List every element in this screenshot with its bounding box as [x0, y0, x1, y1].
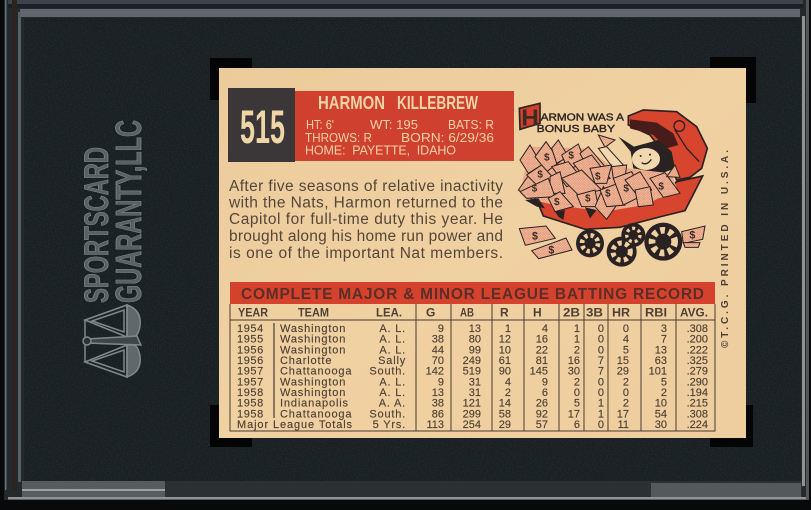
table data rows: 17 — [568, 408, 580, 420]
table data rows: 4 — [505, 376, 511, 388]
table data rows: 1 — [505, 323, 511, 335]
pile of money: $ — [537, 169, 543, 180]
cartoon caption: H — [521, 104, 539, 130]
table header row: AB — [460, 306, 474, 320]
table data rows: 0 — [623, 387, 629, 399]
table data rows: A. A. — [379, 398, 406, 410]
logo text: Sportscard Guaranty, LLC — [78, 120, 149, 303]
table data rows: 9 — [438, 323, 444, 335]
table data rows: 44 — [432, 344, 444, 356]
table data rows: 10 — [499, 344, 511, 356]
player stats: THROWS: R — [305, 131, 372, 145]
table data rows: 2 — [623, 398, 629, 410]
table data rows: 1958 — [237, 387, 264, 399]
table data rows: 38 — [432, 398, 444, 410]
table data rows: 121 — [463, 398, 481, 410]
table data rows: 0 — [623, 323, 629, 335]
table data rows: South. — [369, 366, 406, 378]
table data rows: 145 — [530, 366, 548, 378]
table data rows: 3 — [661, 323, 667, 335]
table header row: R — [500, 306, 509, 320]
table data rows: 15 — [617, 355, 629, 367]
table data rows: 38 — [432, 334, 444, 346]
pile of money: $ — [544, 153, 550, 164]
table data rows: Chattanooga — [280, 408, 352, 420]
table data rows: 0 — [598, 376, 604, 388]
table header row: AVG. — [680, 306, 708, 320]
table title band: COMPLETE MAJOR & MINOR LEAGUE BATTING RECORD — [241, 286, 704, 303]
grading company logo — [78, 120, 149, 377]
table header row: LEA. — [376, 306, 402, 320]
player name — [318, 93, 478, 113]
table data rows: 2 — [505, 387, 511, 399]
table data rows: 7 — [598, 366, 604, 378]
table data rows: 4 — [623, 334, 629, 346]
table data rows: 5 Yrs. — [373, 419, 406, 431]
number box — [228, 88, 295, 162]
biography text: After five seasons of relative inactivity — [229, 178, 503, 195]
batting record table — [230, 282, 715, 431]
table data rows: 30 — [568, 366, 580, 378]
table data rows: 54 — [655, 408, 667, 420]
table data rows: 12 — [499, 334, 511, 346]
table data rows: 7 — [598, 355, 604, 367]
loose dollar bills: $ — [548, 244, 554, 256]
pile of money: $ — [554, 197, 560, 208]
table data rows: 80 — [469, 334, 481, 346]
cartoon caption — [519, 103, 624, 135]
table data rows: Charlotte — [280, 355, 332, 367]
table data rows: Chattanooga — [280, 366, 352, 378]
number box: 515 — [240, 100, 285, 153]
icon: scales of justice — [83, 305, 141, 377]
pile of money — [518, 135, 680, 220]
table data rows: 9 — [438, 376, 444, 388]
table data rows: Washington — [280, 344, 346, 356]
printed in USA credit: ©T.C.G. PRINTED IN U.S.A. — [720, 150, 731, 348]
table data rows: 26 — [536, 398, 548, 410]
table header row: TEAM — [298, 306, 329, 320]
table data rows: 1956 — [237, 355, 264, 367]
table data rows: 6 — [542, 387, 548, 399]
table data rows: 0 — [598, 387, 604, 399]
table data rows: 2 — [574, 376, 580, 388]
table data rows: 16 — [536, 334, 548, 346]
table header row: RBI — [645, 306, 667, 320]
table data rows: 4 — [542, 323, 548, 335]
table data rows: 31 — [469, 387, 481, 399]
table data rows: Washington — [280, 376, 346, 388]
table data rows: 58 — [499, 408, 511, 420]
table data rows: 5 — [661, 376, 667, 388]
table data rows: .308 — [687, 323, 708, 335]
table data rows: Washington — [280, 387, 346, 399]
table data rows: 1957 — [237, 376, 264, 388]
pile of money: $ — [585, 194, 591, 205]
table data rows: 31 — [469, 376, 481, 388]
table header row: HR — [612, 306, 630, 320]
table data rows: 5 — [574, 398, 580, 410]
baseball card back — [219, 68, 746, 438]
table data rows: 70 — [432, 355, 444, 367]
table data rows: 17 — [617, 408, 629, 420]
table data rows: 1 — [598, 408, 604, 420]
table data rows: 5 — [623, 344, 629, 356]
player name: HARMON — [318, 93, 385, 113]
cartoon caption: BONUS BABY — [537, 124, 615, 135]
baby — [618, 137, 675, 173]
table data rows: A. L. — [379, 334, 406, 346]
table data rows: 0 — [598, 419, 604, 431]
table data rows: 101 — [649, 366, 667, 378]
table data rows: Sally — [378, 355, 406, 367]
player info panel — [295, 91, 514, 161]
table data rows: A. L. — [379, 323, 406, 335]
table data rows: 29 — [617, 366, 629, 378]
table data rows: 16 — [568, 355, 580, 367]
table data rows: 1 — [574, 323, 580, 335]
table data rows: 1958 — [237, 408, 264, 420]
table data rows: .308 — [687, 408, 708, 420]
table data rows: .200 — [687, 334, 708, 346]
table data rows — [237, 323, 708, 431]
table data rows: 142 — [426, 366, 444, 378]
table data rows: 81 — [536, 355, 548, 367]
table data rows: 29 — [499, 419, 511, 431]
player stats: BORN: 6/29/36 — [401, 131, 494, 145]
table data rows: 1 — [598, 398, 604, 410]
player name: KILLEBREW — [397, 93, 478, 113]
table data rows: 7 — [661, 334, 667, 346]
player stats: BATS: R — [448, 118, 494, 132]
pile of money: $ — [568, 150, 574, 161]
table data rows: .194 — [687, 387, 708, 399]
table data rows: 0 — [598, 334, 604, 346]
table data rows: 1955 — [237, 334, 264, 346]
table data rows: 61 — [499, 355, 511, 367]
table data rows: .325 — [687, 355, 708, 367]
table header row: 3B — [586, 306, 603, 320]
table data rows: 22 — [536, 344, 548, 356]
table data rows: 90 — [499, 366, 511, 378]
table header row: G — [426, 306, 435, 320]
table data rows: .215 — [687, 398, 708, 410]
table header row — [238, 306, 708, 320]
table data rows: 2 — [661, 387, 667, 399]
biography text: is one of the important Nat members. — [229, 245, 503, 262]
cartoon: Harmon was a bonus baby — [518, 103, 707, 267]
table data rows: 99 — [469, 344, 481, 356]
table data rows: 30 — [655, 419, 667, 431]
loose dollar bills: $ — [689, 230, 695, 242]
table data rows: Washington — [280, 323, 346, 335]
player stats: WT: 195 — [370, 118, 418, 132]
table data rows: .224 — [687, 419, 708, 431]
table data rows: 1954 — [237, 323, 264, 335]
table data rows: 57 — [536, 419, 548, 431]
table data rows: 0 — [598, 323, 604, 335]
table data rows: 86 — [432, 408, 444, 420]
player stats: HT: 6' — [306, 118, 334, 132]
table header row: YEAR — [238, 306, 268, 320]
table data rows: Washington — [280, 334, 346, 346]
biography text: with the Nats, Harmon returned to the — [228, 194, 503, 212]
pile of money: $ — [605, 189, 611, 200]
table data rows: Major League Totals — [237, 419, 353, 431]
cartoon caption: ARMON WAS A — [541, 113, 624, 124]
card well corners — [210, 57, 756, 447]
biography text: brought along his home run power and — [229, 228, 503, 245]
table data rows: 13 — [655, 344, 667, 356]
pram wheels — [576, 223, 682, 267]
table data rows: 11 — [618, 419, 629, 431]
biography text: Capitol for full-time duty this year. He — [229, 211, 503, 228]
table data rows: 10 — [655, 398, 667, 410]
table data rows: 519 — [463, 366, 481, 378]
table data rows: 14 — [499, 398, 511, 410]
table data rows: .279 — [687, 366, 708, 378]
table data rows: A. L. — [379, 376, 406, 388]
loose dollar bills: $ — [532, 230, 538, 242]
table data rows: 92 — [536, 408, 548, 420]
table rules — [230, 304, 715, 431]
table data rows: 63 — [655, 355, 667, 367]
table data rows: Indianapolis — [280, 398, 349, 410]
pram hood — [628, 110, 707, 180]
table data rows: 0 — [574, 387, 580, 399]
table data rows: 249 — [463, 355, 481, 367]
pile of money: $ — [623, 184, 629, 195]
table data rows: 9 — [542, 376, 548, 388]
logo text: Sportscard Guaranty, LLC: SPORTSCARD — [78, 147, 116, 303]
table data rows: 299 — [463, 408, 481, 420]
table data rows: 2 — [574, 344, 580, 356]
pile of money: $ — [658, 181, 664, 192]
table data rows: 113 — [426, 419, 444, 431]
logo text: Sportscard Guaranty, LLC: GUARANTY,LLC — [108, 120, 149, 303]
table header row: 2B — [563, 306, 580, 320]
player stats: HOME: PAYETTE, IDAHO — [305, 144, 456, 158]
table data rows: A. L. — [379, 387, 406, 399]
pram body — [537, 176, 703, 229]
table data rows: 13 — [432, 387, 444, 399]
pile of money: $ — [532, 184, 538, 195]
table header row: H — [533, 306, 542, 320]
table data rows: A. L. — [379, 344, 406, 356]
table data rows: 0 — [598, 344, 604, 356]
pile of money: $ — [595, 171, 601, 182]
table data rows: 1958 — [237, 398, 264, 410]
table data rows: .222 — [687, 344, 708, 356]
biography text — [228, 178, 503, 262]
loose dollar bills — [519, 226, 705, 259]
table data rows: .290 — [687, 376, 708, 388]
table data rows: South. — [369, 408, 406, 420]
table data rows: 1956 — [237, 344, 264, 356]
table data rows: 2 — [623, 376, 629, 388]
table data rows: 13 — [469, 323, 481, 335]
table data rows: 1 — [574, 334, 580, 346]
table data rows: 254 — [463, 419, 481, 431]
player stats — [305, 118, 494, 158]
table data rows: 1957 — [237, 366, 264, 378]
table data rows: 6 — [574, 419, 580, 431]
